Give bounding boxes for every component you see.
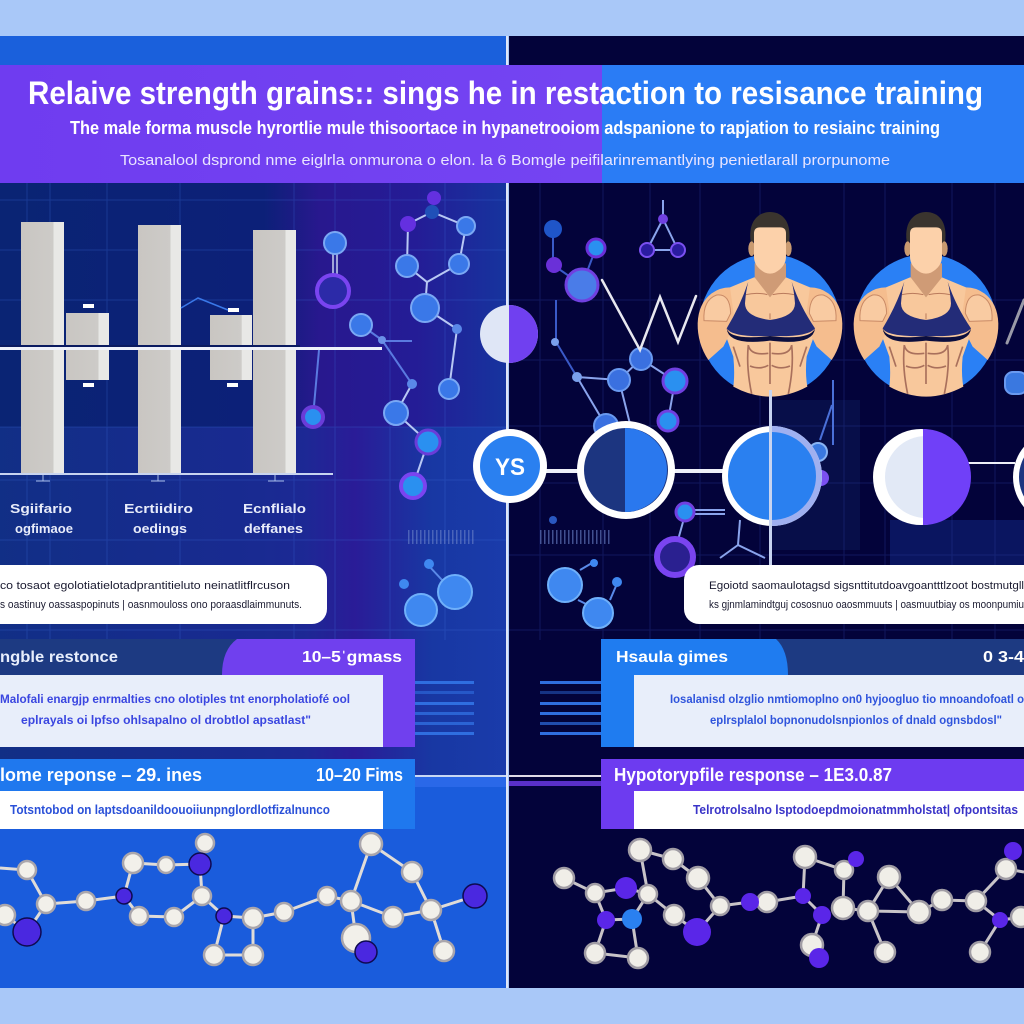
node: right-edge blue circle: [1005, 372, 1024, 394]
bar labels: ogfimaoe: [15, 521, 73, 536]
pie: navy and blue: [577, 421, 675, 519]
figure: muscular torso left: [698, 212, 842, 397]
callout: left: [0, 565, 327, 624]
bar labels: Sgiifario: [10, 501, 72, 516]
callout: left: s oastinuy oassaspopinuts | oasnmouloss ono poraasdlaimmunuts.: [0, 599, 302, 611]
bar labels: oedings: [133, 521, 187, 536]
tagline: Tosanalool dsprond nme eiglrla onmurona o elon. la 6 Bomgle peifilarinremantlying penietlarall prorpunome: [120, 152, 890, 169]
card: right upper: eplrsplalol bopnonudolsnpionlos of dnald ognsbdosl": [710, 713, 1002, 727]
panel: left (blue) background: [0, 36, 507, 988]
badge: VS: YS: [495, 454, 525, 481]
card heading: lome reponse – 29. ines: [0, 765, 202, 785]
bar labels: [10, 501, 306, 536]
bar labels: Ecrtiidiro: [124, 501, 193, 516]
pie: white and purple: [873, 429, 971, 525]
stripes: right: [540, 681, 601, 735]
badge: VS: [473, 429, 547, 503]
card value: 0 3-4: [983, 649, 1024, 666]
card: left upper: [0, 639, 415, 747]
molecule: right bottom chain: [554, 839, 1024, 968]
callout: right: [684, 565, 1024, 624]
card heading: Hsaula gimes: [616, 649, 728, 666]
bar chart: [0, 222, 382, 481]
header banner: [0, 65, 1024, 183]
molecule: left upper cluster: [303, 191, 475, 498]
pie: all blue: [722, 390, 822, 565]
stripes: left: [415, 681, 474, 735]
card value: 10–20 Fims: [316, 765, 403, 785]
barcode strips: [408, 530, 612, 544]
bar labels: deffanes: [244, 521, 303, 536]
card: left lower: [0, 759, 415, 829]
callout: right: Egoiotd saomaulotagsd sigsnttitutdoavgoantttlzoot bostmutgll: [709, 580, 1024, 592]
molecule: left bottom chain: [0, 833, 487, 965]
connector line: right lower: [509, 775, 601, 786]
icon: top center half circle: [480, 305, 538, 363]
connector line: left lower: [415, 775, 506, 787]
card value: 10–5ˈgmass: [302, 649, 402, 666]
card body text: Malofali enargjp enrmalties cno olotiples tnt enorpholatiofé ool: [0, 692, 350, 706]
callout: left: co tosaot egolotiatielotadprantitieluto neinatlitflrcuson: [0, 580, 290, 592]
center divider line: [506, 36, 508, 988]
card heading: Hypotorypfile response – 1E3.0.87: [614, 765, 892, 785]
node: beside blue pie: [809, 380, 833, 486]
card heading: ngble restonce: [0, 649, 118, 666]
molecule: left lower cluster: [399, 559, 472, 626]
card: right lower: [601, 759, 1024, 829]
card: right upper: [601, 639, 1024, 747]
figure: muscular torso right: [854, 212, 998, 397]
zigzag trend line: [602, 280, 1024, 350]
card: left upper: eplrayals oi lpfso ohlsapalno ol drobtlol apsatlast": [21, 713, 311, 727]
card body text: Totsntobod on laptsdoanildoouoiiunpnglordlotfizalnunco: [10, 802, 330, 817]
bar labels: Ecnflialo: [243, 501, 306, 516]
connector: horizontal comparison links: [546, 462, 1015, 473]
pie: right edge ring: [1016, 433, 1024, 521]
molecule: right lower cluster: [548, 503, 765, 628]
panel: right (navy) background: [509, 36, 1024, 988]
molecule: right upper cluster: [544, 200, 687, 438]
subtitle: The male forma muscle hyrortlie mule thisoortace in hypanetrooiom adspanione to rapjation to resiainc training: [70, 118, 940, 138]
